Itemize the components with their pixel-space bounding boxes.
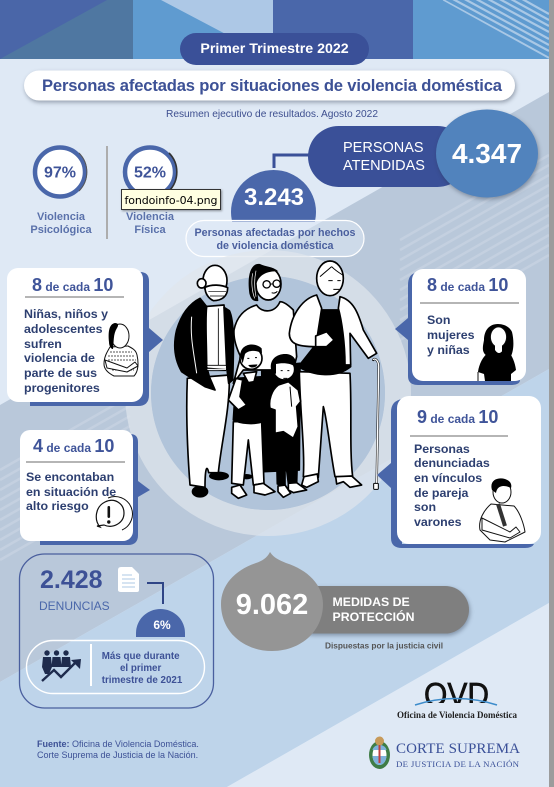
icon: coat of arms [369,736,390,769]
title: Personas afectadas por situaciones de violencia doméstica [42,76,503,95]
figure: girl with backpack [228,345,275,498]
stat: violencia física: Física [134,224,166,236]
card text: sufren [24,337,62,351]
header band [0,0,549,59]
logo: Corte Suprema [369,736,520,769]
badge: 6%: 6% [153,618,171,632]
stat: personas afectadas: 3.243 [244,184,304,211]
card text: progenitores [24,381,100,395]
card text: Son [427,313,450,327]
card text: de pareja [414,486,469,500]
stat: personas atendidas: PERSONAS [343,140,424,156]
logo: OVD: Oficina de Violencia Doméstica [397,710,518,720]
stat: 2.428: 2.428 [40,566,103,594]
stat: violencia física: 52% [134,164,166,182]
illustration: family [175,261,379,498]
stat: violencia psicológica: 97% [44,164,76,182]
card text: varones [414,515,462,529]
stat heading: 4 de cada 10 [33,436,114,456]
divider [106,146,108,239]
card text: y niñas [427,343,470,357]
stat heading: 9 de cada 10 [417,407,498,427]
tooltip: fondoinfo-04.png [124,194,218,207]
icon: document [118,567,139,592]
card text: violencia de [24,351,95,365]
card text: en vínculos [414,471,482,485]
source: Corte Suprema de Justicia de la Nación. [37,750,198,760]
icon: alert speech bubble [96,497,132,530]
caption: justicia civil: Dispuestas por la justicia civil [325,640,443,650]
stat: personas atendidas: 4.347 [452,138,522,169]
stat: personas afectadas [186,170,364,256]
title [24,70,515,100]
stat heading: 8 de cada 10 [427,275,508,295]
card text: Niñas, niños y [24,307,108,321]
stat: medidas de protección: MEDIDAS DE [332,595,410,609]
figure: child with embroidered shirt [270,354,307,497]
period badge: Primer Trimestre 2022 [200,41,349,57]
comparison pill: Más que durante [102,651,180,662]
stat: personas afectadas: Personas afectadas por hechos [195,227,356,239]
comparison pill: el primer [120,663,162,674]
icon: people with rising arrow [42,650,81,681]
card text: alto riesgo [26,499,89,513]
stat: violencia física [125,148,177,236]
stat: medidas de protección: PROTECCIÓN [332,609,415,624]
stat: personas afectadas: de violencia doméstica [216,240,335,252]
card text: en situación de [26,485,116,499]
stat: violencia psicológica [30,148,92,236]
comparison pill [26,640,204,694]
panel: denuncias [20,554,214,708]
badge: 6% [136,609,185,637]
card text: Se encontaban [26,470,114,484]
stat: personas atendidas: ATENDIDAS [343,158,425,174]
card: alto riesgo [20,430,150,545]
comparison pill: trimestre de 2021 [102,675,183,686]
figure: woman with glasses [233,264,300,479]
right gutter [549,0,554,787]
card text: denunciadas [414,456,490,470]
icon: girl with crossed arms [104,323,138,376]
label: denuncias: DENUNCIAS [39,599,110,613]
card text: Personas [414,442,470,456]
logo: OVD: OVD [424,676,489,713]
logo: Corte Suprema: CORTE SUPREMA [396,741,520,757]
icon: woman [478,324,516,381]
stat: medidas de protección: 9.062 [236,589,308,621]
card text: adolescentes [24,322,103,336]
card text: parte de sus [24,366,97,380]
logo: OVD [397,682,517,718]
figure: man [175,265,233,498]
icon: man with tie [480,478,525,542]
logo: Corte Suprema: DE JUSTICIA DE LA NACIÓN [396,759,520,769]
source: Fuente: Oficina de Violencia Doméstica. [37,739,199,749]
stat: violencia psicológica: Psicológica [30,224,92,236]
stat: medidas de protección [221,552,469,651]
stat: personas atendidas [308,110,538,198]
tooltip [122,190,220,210]
figure: elderly woman with cane [289,261,379,489]
subtitle: Resumen ejecutivo de resultados. Agosto 2022 [166,109,378,120]
card text: mujeres [427,328,475,342]
ring behind family [138,263,398,523]
stat heading: 8 de cada 10 [32,275,113,295]
stat: violencia psicológica: Violencia [37,211,86,223]
stat: violencia física: Violencia [126,211,175,223]
connector [147,583,163,604]
card: niñas, niños y adolescentes [7,268,163,406]
card: personas denunciadas [377,396,541,548]
card: mujeres y niñas [395,269,526,385]
card text: son [414,500,436,514]
period badge [180,33,369,65]
connector: personas atendidas to afectadas [274,155,310,168]
